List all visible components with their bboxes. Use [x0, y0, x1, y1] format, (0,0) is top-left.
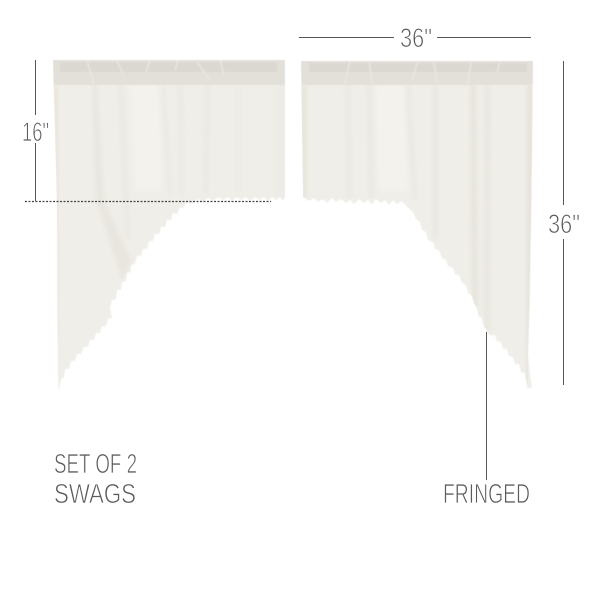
left swag fabric	[53, 60, 285, 391]
left swag curtain	[53, 60, 285, 395]
dimension: 16 inch height: 16"	[22, 117, 49, 147]
left swag side hem	[54, 86, 58, 251]
diagram: curtain swags with dimensions	[23, 28, 579, 503]
right swag fabric	[301, 61, 533, 388]
dimension: 36 inch width: 36"	[400, 23, 432, 53]
label: set of 2 swags: SET OF 2	[54, 448, 137, 479]
right swag header band	[301, 60, 533, 85]
callout: fringed: FRINGED	[443, 478, 530, 509]
left swag header band	[53, 60, 285, 85]
left swag folds	[98, 156, 128, 270]
dimension: 36 inch drop: 36"	[548, 209, 580, 239]
right swag curtain	[301, 60, 533, 388]
label: swags: SWAGS	[54, 478, 136, 509]
right swag side hems	[301, 85, 533, 385]
right swag folds	[471, 86, 492, 336]
